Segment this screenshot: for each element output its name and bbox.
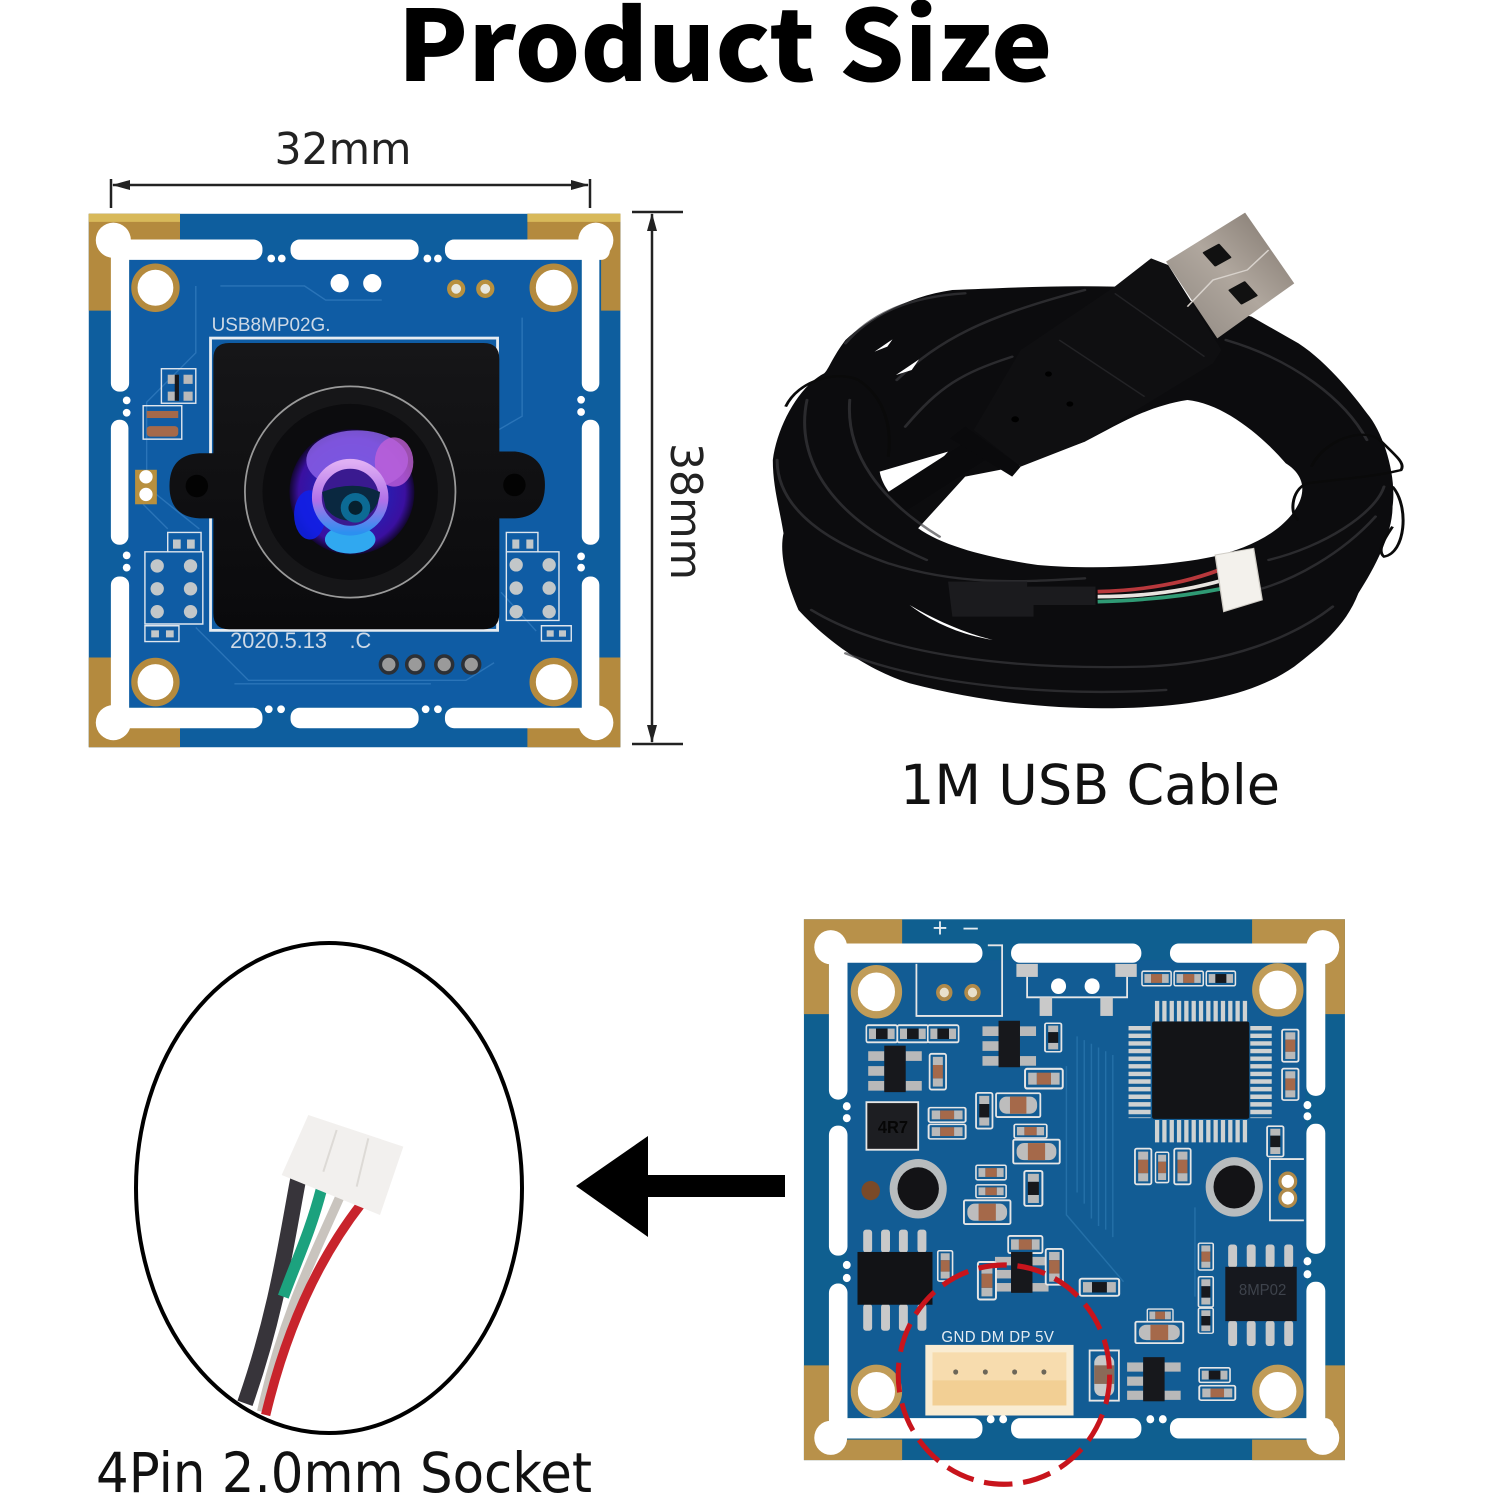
USB metal plug: [1166, 213, 1294, 338]
silk plus and minus: +: [932, 912, 948, 943]
SOIC chips: 8MP02: [1239, 1282, 1286, 1299]
socket: [925, 1345, 1074, 1416]
camera board front: .C: [349, 628, 371, 653]
gaps between coils: [875, 339, 993, 640]
lens glass: [289, 429, 414, 555]
USB cable: [773, 213, 1403, 708]
USB moulded connector: [974, 258, 1222, 467]
silk outlines and through holes: [916, 945, 1304, 1220]
width dimension: 32mm: [111, 124, 590, 208]
camera board back: [804, 911, 1345, 1484]
pin labels: GND DM DP 5V: [941, 1329, 1055, 1346]
arrow: [576, 1136, 785, 1237]
cable coil silhouette: [773, 286, 1393, 708]
mounting holes: [854, 967, 1300, 1414]
height dimension: 38mm: [632, 212, 711, 744]
lens holder: [211, 338, 498, 630]
height dimension: 38mm: 38mm: [660, 443, 711, 580]
camera board back: –: [964, 911, 978, 941]
wires: [1098, 570, 1224, 602]
connector circle: [136, 943, 522, 1433]
slots: [814, 930, 1339, 1455]
silk text: USB8MP02G.: [212, 315, 331, 336]
zoomed wires and plug: [245, 1115, 403, 1415]
SOIC chips: [857, 1230, 1297, 1346]
cable ties: [786, 376, 1403, 557]
heat shrink sleeve: [948, 582, 1096, 617]
white slots: [96, 223, 613, 740]
main chip body: [1152, 1022, 1249, 1119]
mounting holes: [134, 267, 575, 703]
descending cable and strain relief: [897, 447, 982, 502]
pads and components: [331, 274, 349, 292]
cable label: 1M USB Cable: [900, 753, 1280, 817]
camera board front: 2020.5.13: [230, 628, 327, 653]
width dimension: 32mm: 32mm: [274, 124, 412, 175]
white connector: [1215, 548, 1262, 612]
inductor: 4R7: [878, 1118, 908, 1137]
coil highlights: [777, 290, 1384, 692]
camera board front: [89, 214, 620, 747]
inner board: [129, 260, 580, 707]
main chip pins: [1140, 1011, 1261, 1131]
screws: [890, 1157, 1263, 1219]
lens barrel: [245, 386, 455, 598]
small components: [866, 971, 1299, 1401]
inductor: [866, 1102, 918, 1150]
red dashed highlight: [898, 1265, 1110, 1484]
